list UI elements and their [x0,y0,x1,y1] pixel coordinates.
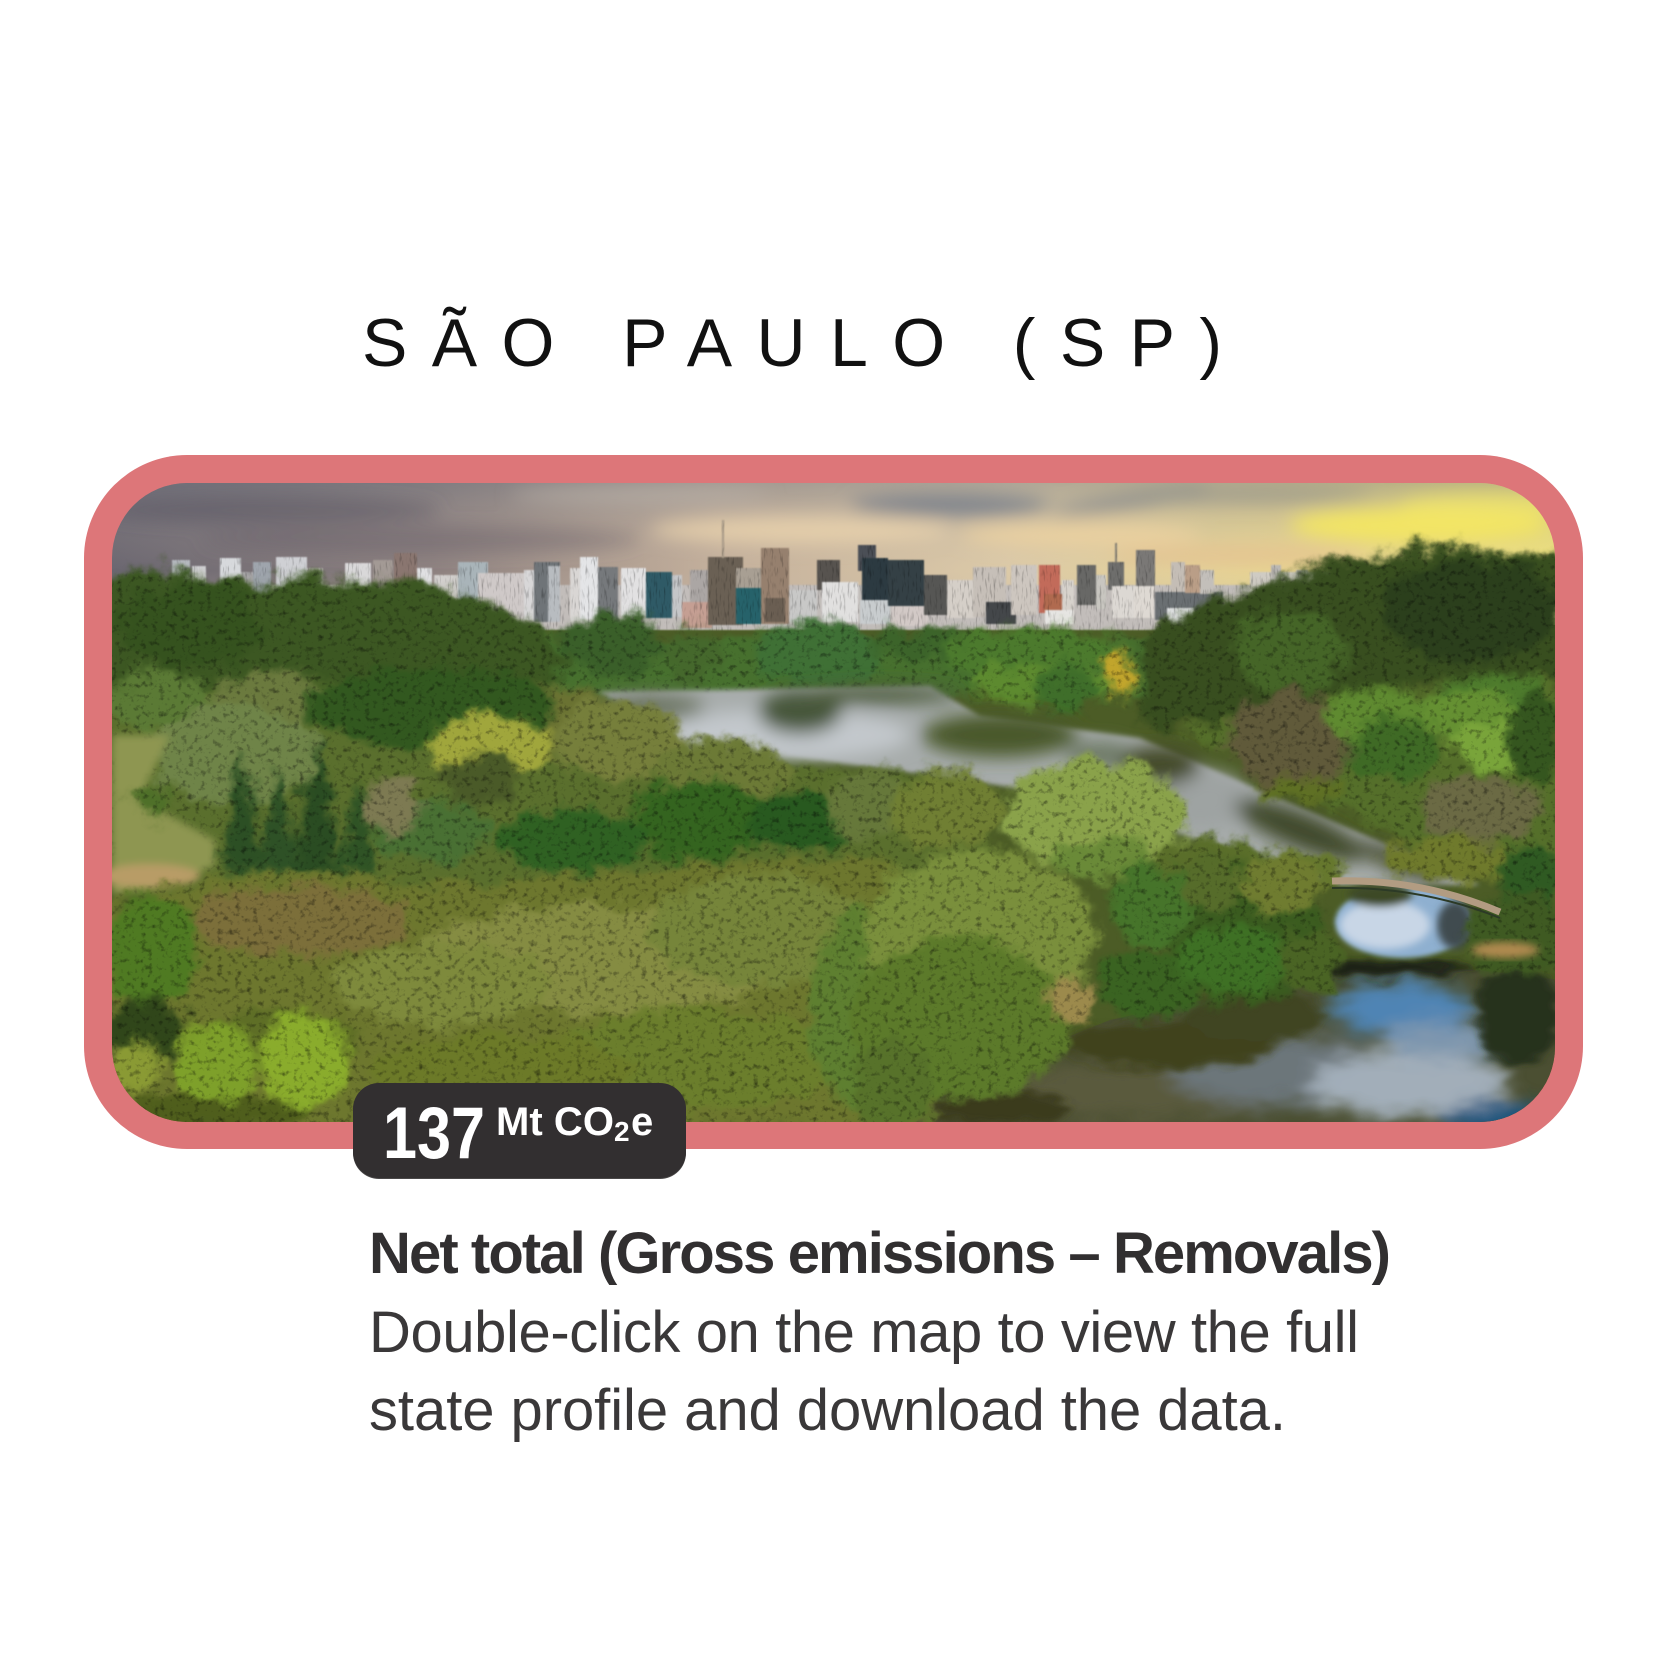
bold heading line: Net total (Gross emissions – Removals) [369,1221,1391,1286]
description text [369,1221,1391,1443]
value badge: 137 Mt CO2e: 2 [614,1116,630,1147]
green tree mass and island [850,850,1342,1135]
right park trees [1180,673,1575,975]
mid park trees, left and right [105,668,1010,900]
big tree by the river [1001,760,1345,888]
title: SÃO PAULO (SP) [362,305,1222,381]
panel: framed photo card [84,455,1583,1149]
river bank and footbridge [1332,881,1539,958]
body copy: Double-click on the map to view the full [369,1300,1359,1365]
skyline [130,520,1340,630]
pines [130,740,421,875]
value badge: 137 Mt CO2e: 137 [383,1093,485,1174]
photo: park and skyline [100,481,1580,1135]
bright shrubs, lower left [111,1012,350,1108]
body copy [369,1300,1359,1443]
distant trees [500,613,1220,712]
body copy: state profile and download the data. [369,1378,1286,1443]
value badge: 137 Mt CO2e: e [631,1100,653,1144]
photo ground base [112,625,1555,1125]
olive canopy in the foreground [105,860,1000,1130]
photo frame [84,455,1583,1149]
lawn [100,735,215,895]
sky [112,483,1555,625]
dark hillside forests [105,545,1560,725]
value badge: 137 Mt CO2e [353,1083,686,1179]
lake [595,686,1560,1134]
value badge: 137 Mt CO2e: Mt CO [496,1100,614,1144]
